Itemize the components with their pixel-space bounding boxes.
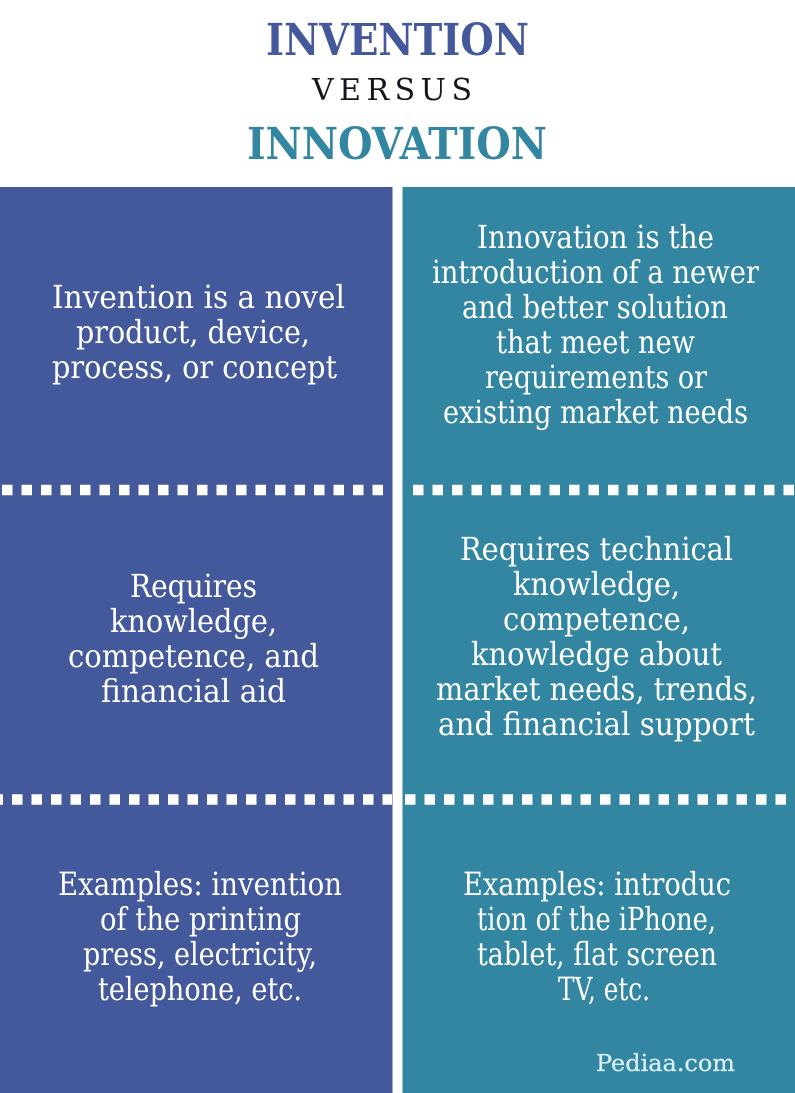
title: invention: INVENTION <box>266 15 529 66</box>
text: invention definition <box>52 278 345 386</box>
divider row 1 <box>2 485 795 495</box>
text: invention definition: Invention is a novel <box>52 278 345 316</box>
title block <box>247 15 547 170</box>
text: innovation requirements: knowledge about <box>471 635 722 673</box>
text: innovation requirements: Requires technical <box>460 530 733 568</box>
text: invention requirements <box>68 567 319 710</box>
text: innovation examples: TV, etc. <box>558 970 650 1008</box>
logo: Pediaa.com: Pediaa.com <box>596 1051 735 1077</box>
text: invention definition: process, or concept <box>52 348 337 386</box>
text: invention examples: of the printing <box>100 900 301 938</box>
title: versus: VERSUS <box>311 73 472 108</box>
text: innovation definition <box>432 218 760 431</box>
text: invention definition: product, device, <box>76 313 310 351</box>
text: innovation requirements: market needs, trends, <box>436 670 757 708</box>
text: invention requirements: competence, and <box>68 637 319 675</box>
text: innovation examples: Examples: introduc <box>463 865 731 903</box>
text: innovation requirements: competence, <box>503 600 690 638</box>
text: innovation definition: and better solution <box>462 288 728 326</box>
text: innovation definition: that meet new <box>496 323 695 361</box>
text: innovation examples: tion of the iPhone, <box>477 900 716 938</box>
text: innovation examples <box>463 865 731 1008</box>
text: innovation requirements <box>436 530 757 743</box>
text: invention examples: Examples: invention <box>58 865 342 903</box>
text: invention examples: telephone, etc. <box>98 970 302 1008</box>
text: innovation requirements: knowledge, <box>513 565 680 603</box>
text: invention requirements: financial aid <box>101 672 286 710</box>
text: invention examples: press, electricity, <box>83 935 317 973</box>
title: innovation: INNOVATION <box>247 119 547 170</box>
panel: innovation column <box>402 187 795 1093</box>
text: innovation definition: existing market needs <box>443 393 748 431</box>
text: innovation requirements: and financial support <box>438 705 755 743</box>
text: innovation definition: requirements or <box>485 358 708 396</box>
divider row 2 <box>0 794 787 805</box>
text: invention requirements: Requires <box>130 567 257 605</box>
text: innovation definition: Innovation is the <box>477 218 714 256</box>
text: invention examples <box>58 865 342 1008</box>
panel: invention column <box>0 187 392 1093</box>
text: innovation examples: tablet, flat screen <box>477 935 717 973</box>
text: invention requirements: knowledge, <box>110 602 277 640</box>
